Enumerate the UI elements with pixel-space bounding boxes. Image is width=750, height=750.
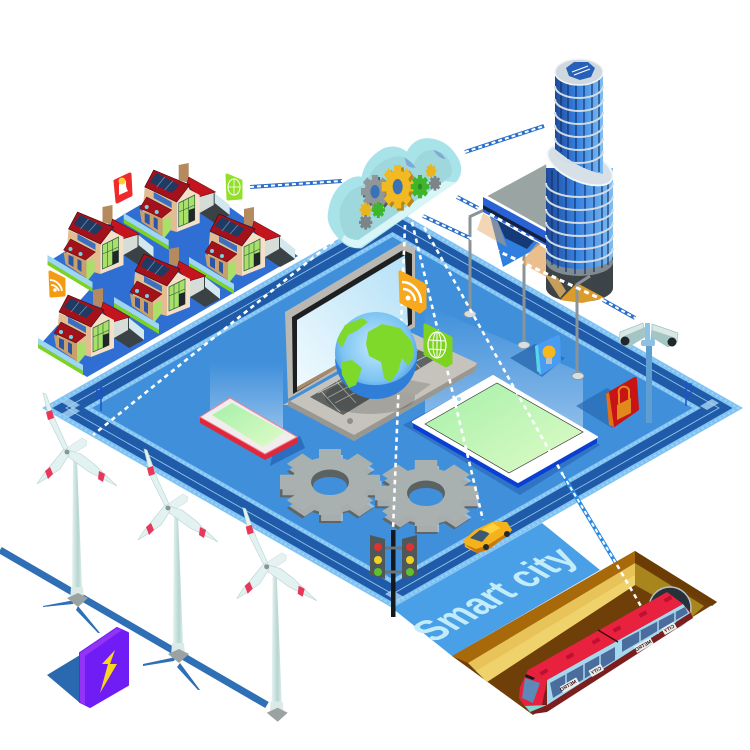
data lines: white dashed links across the platform (93, 220, 642, 608)
icon: wifi on laptop (400, 272, 425, 312)
lamp: third street light (572, 276, 590, 380)
icon: light bulb (535, 337, 559, 374)
translucent light column behind tablet (425, 305, 583, 432)
crosswalks at the corners (61, 398, 719, 601)
icon shadows (510, 344, 640, 428)
laptop (283, 242, 477, 441)
train side labels (559, 624, 676, 693)
lamp: second street light (518, 243, 538, 348)
connection cable: cloud to tower (465, 126, 544, 152)
translucent light column behind phone (210, 362, 283, 430)
cable from cloud toward camera (423, 216, 635, 318)
train side labels: CITY (589, 666, 603, 677)
icon: padlock (606, 379, 637, 427)
train side labels: CITY (662, 624, 676, 635)
train label plates (560, 622, 677, 693)
icon: globe green (227, 175, 241, 199)
lamp: first street light (464, 210, 484, 318)
metro tunnel mouth (649, 587, 691, 629)
metro trench (452, 551, 717, 715)
icon: globe on laptop (425, 325, 451, 366)
houses yard ground (38, 198, 298, 377)
heading: Smart city: Smart city (401, 540, 587, 647)
security camera (619, 323, 678, 423)
building: glass tower (542, 59, 618, 303)
taxi car (464, 522, 512, 553)
traffic lights (370, 530, 417, 617)
icon: bell (115, 174, 131, 202)
metro train (519, 592, 693, 714)
phone (200, 398, 305, 466)
train side labels: METRO (634, 639, 653, 653)
platform: city base with ring road (42, 208, 743, 608)
wind farm ground cable (0, 550, 267, 705)
cable from cloud through building (457, 197, 535, 240)
wind turbine: middle (138, 449, 218, 663)
tablet (403, 376, 600, 495)
globe (335, 312, 417, 399)
house: lower left (38, 288, 144, 375)
train side labels: METRO (559, 679, 578, 693)
small road signs (97, 381, 691, 411)
house: middle (114, 247, 220, 334)
house: top (124, 163, 230, 250)
icon: wifi orange (50, 272, 64, 296)
turbine mounting shadows (43, 600, 200, 690)
house: left (48, 205, 154, 292)
icon: lightning bolt with shadow (47, 628, 128, 707)
building: low mall (477, 163, 547, 277)
connection cable: houses to cloud (250, 181, 342, 187)
gear: left large (280, 449, 382, 523)
cable from platform to metro (563, 475, 617, 565)
house: right (189, 207, 295, 294)
smart city ground strip (392, 523, 600, 656)
wind turbine: left (37, 393, 117, 607)
cloud with gears (328, 138, 461, 248)
cloud gears (359, 164, 441, 230)
gear: right large (375, 460, 478, 534)
wind turbine: right (237, 508, 317, 722)
